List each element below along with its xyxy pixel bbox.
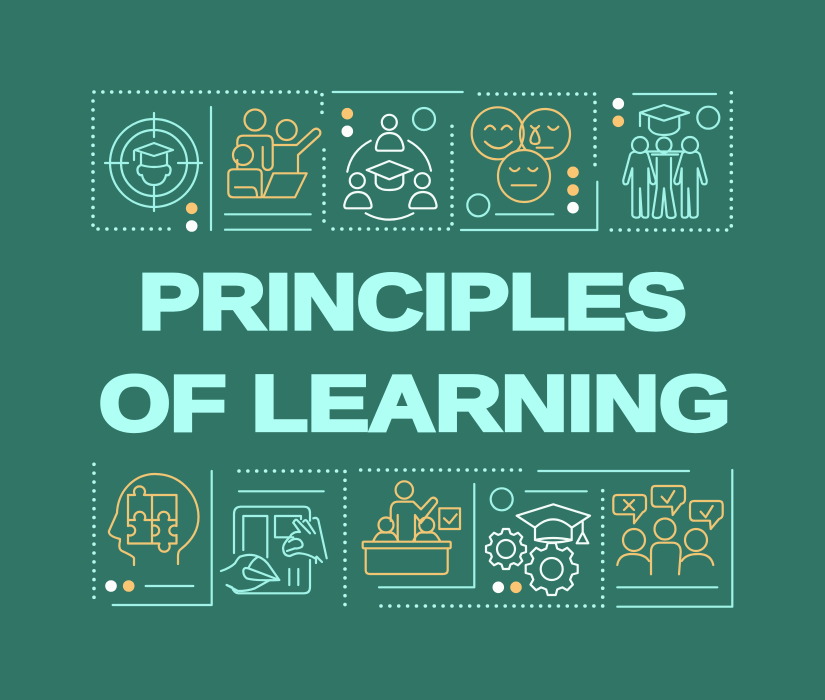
icon: circle of learners around a graduation cap <box>344 115 437 220</box>
accent dots, top row <box>186 98 719 232</box>
accent dots, bottom row <box>105 488 522 593</box>
icon: group discussion with speech bubbles <box>613 486 723 574</box>
large gear <box>526 543 578 595</box>
icon: head with puzzle pieces <box>109 474 198 565</box>
title: PRINCIPLES <box>139 258 687 345</box>
icon: teacher with students and laptop <box>228 110 320 197</box>
icon: three emotion faces <box>472 107 570 202</box>
title <box>99 258 730 446</box>
icon: group of three graduates <box>623 105 707 218</box>
panel: top icon row <box>93 92 731 232</box>
panel: bottom icon row <box>94 464 732 607</box>
title: OF LEARNING <box>99 360 730 446</box>
icon: teacher at podium with checkbox <box>363 481 460 574</box>
icon: target with graduate <box>105 113 202 211</box>
small gear <box>486 529 526 569</box>
panel frame: dotted and solid rules, top row <box>93 92 731 230</box>
icon: hands writing on a tablet <box>221 507 327 593</box>
panel frame: dotted and solid rules, bottom row <box>94 464 732 607</box>
icon: graduation cap and gears <box>486 504 590 595</box>
